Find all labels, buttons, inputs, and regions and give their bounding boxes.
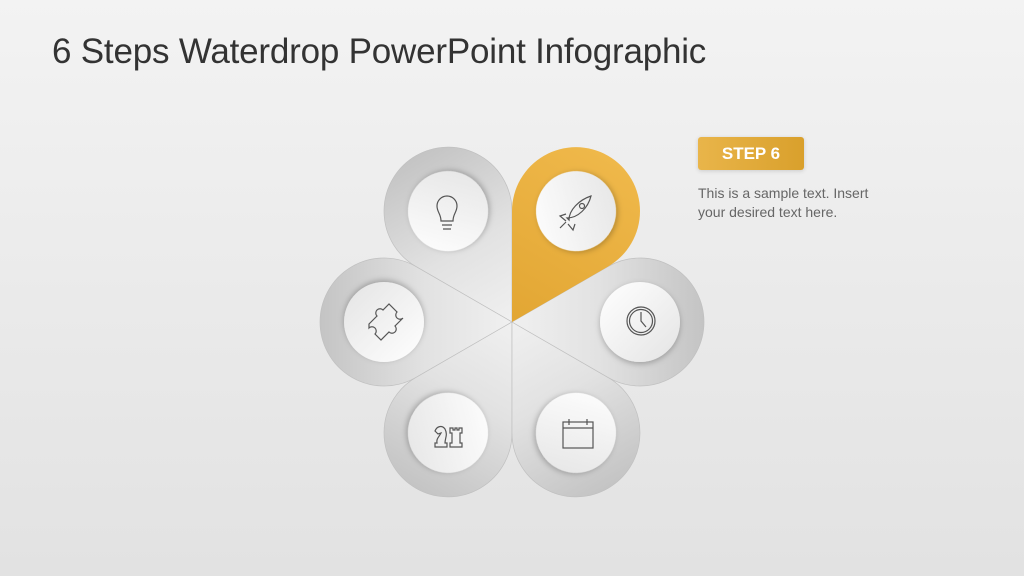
icon: clock xyxy=(627,307,655,335)
drop: calendar xyxy=(457,290,663,520)
drop: clock xyxy=(512,258,704,386)
icon: calendar xyxy=(563,419,593,448)
icon: lightbulb xyxy=(437,196,457,229)
icon: chess xyxy=(435,427,462,447)
icon: puzzle xyxy=(369,304,403,340)
drop: lightbulb xyxy=(361,124,567,354)
step label badge xyxy=(698,137,804,170)
title: 6 Steps Waterdrop PowerPoint Infographic xyxy=(52,32,706,71)
step label badge: STEP 6 xyxy=(722,144,780,163)
drop: chess xyxy=(361,290,567,520)
drop: puzzle xyxy=(320,258,512,386)
description text: This is a sample text. Insert your desired text here. xyxy=(698,185,868,220)
icon: rocket xyxy=(560,196,591,230)
drop: rocket (highlighted step 6) xyxy=(457,124,663,354)
